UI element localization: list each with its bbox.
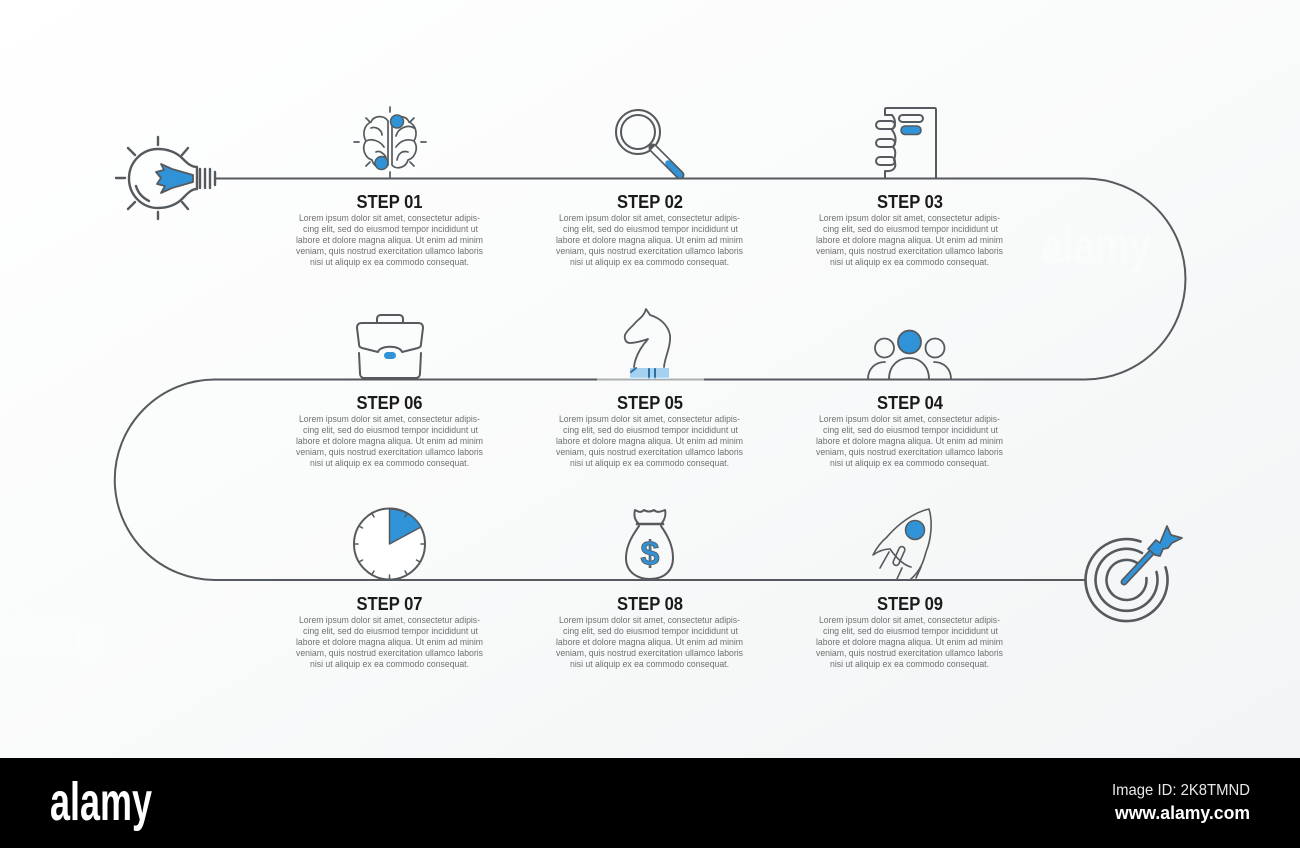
winding roadmap line: [115, 178, 1185, 580]
step 02 text: STEP 02: [617, 192, 683, 212]
step 01 text: veniam, quis nostrud exercitation ullamco laboris: [296, 246, 483, 256]
footer band: alamy: [50, 772, 152, 832]
step 08 text: STEP 08: [617, 594, 683, 614]
step 01 text: [296, 192, 483, 267]
step 09 text: veniam, quis nostrud exercitation ullamco laboris: [816, 648, 1003, 658]
step 07 text: nisi ut aliquip ex ea commodo consequat.: [310, 659, 469, 669]
step 07 text: STEP 07: [356, 594, 422, 614]
step 02 text: nisi ut aliquip ex ea commodo consequat.: [570, 257, 729, 267]
step 05 text: STEP 05: [617, 393, 683, 413]
step 04 text: veniam, quis nostrud exercitation ullamco laboris: [816, 447, 1003, 457]
icon: chess knight: [625, 309, 670, 379]
step 06 text: STEP 06: [356, 393, 422, 413]
icon: magnifying glass: [616, 110, 680, 175]
step 05 text: labore et dolore magna aliqua. Ut enim ad minim: [556, 436, 743, 446]
icon: money bag: [626, 510, 673, 579]
step 06 text: [296, 393, 483, 468]
step 07 text: labore et dolore magna aliqua. Ut enim ad minim: [296, 637, 483, 647]
step 09 text: STEP 09: [877, 594, 943, 614]
step 03 text: [816, 192, 1003, 267]
step 04 text: Lorem ipsum dolor sit amet, consectetur adipis-: [819, 414, 1000, 424]
step 02 text: [556, 192, 743, 267]
icon: document with pills: [876, 108, 936, 178]
step 04 text: labore et dolore magna aliqua. Ut enim ad minim: [816, 436, 1003, 446]
watermarks: [0, 217, 1151, 661]
step 08 text: Lorem ipsum dolor sit amet, consectetur adipis-: [559, 615, 740, 625]
step 05 text: Lorem ipsum dolor sit amet, consectetur adipis-: [559, 414, 740, 424]
step 05 text: veniam, quis nostrud exercitation ullamco laboris: [556, 447, 743, 457]
step 07 text: [296, 594, 483, 669]
step 09 text: nisi ut aliquip ex ea commodo consequat.: [830, 659, 989, 669]
icon: money bag: $: [641, 535, 660, 573]
footer band: www.alamy.com: [1114, 803, 1250, 823]
step 03 text: nisi ut aliquip ex ea commodo consequat.: [830, 257, 989, 267]
step 03 text: veniam, quis nostrud exercitation ullamco laboris: [816, 246, 1003, 256]
step 08 text: labore et dolore magna aliqua. Ut enim ad minim: [556, 637, 743, 647]
step 07 text: cing elit, sed do eiusmod tempor incididunt ut: [303, 626, 478, 636]
step 08 text: veniam, quis nostrud exercitation ullamco laboris: [556, 648, 743, 658]
step 03 text: Lorem ipsum dolor sit amet, consectetur adipis-: [819, 213, 1000, 223]
step 04 text: [816, 393, 1003, 468]
icon: brain: [354, 107, 426, 177]
step 01 text: STEP 01: [356, 192, 422, 212]
watermarks: alamy: [150, 217, 260, 273]
step 04 text: cing elit, sed do eiusmod tempor incididunt ut: [823, 425, 998, 435]
step 06 text: cing elit, sed do eiusmod tempor incididunt ut: [303, 425, 478, 435]
step 02 text: Lorem ipsum dolor sit amet, consectetur adipis-: [559, 213, 740, 223]
step 02 text: labore et dolore magna aliqua. Ut enim ad minim: [556, 235, 743, 245]
icon: start light bulb: [116, 137, 215, 219]
step 01 text: cing elit, sed do eiusmod tempor incididunt ut: [303, 224, 478, 234]
step 08 text: cing elit, sed do eiusmod tempor incididunt ut: [563, 626, 738, 636]
step 04 text: nisi ut aliquip ex ea commodo consequat.: [830, 458, 989, 468]
step 02 text: cing elit, sed do eiusmod tempor incididunt ut: [563, 224, 738, 234]
step 07 text: veniam, quis nostrud exercitation ullamco laboris: [296, 648, 483, 658]
step 05 text: cing elit, sed do eiusmod tempor incididunt ut: [563, 425, 738, 435]
step 09 text: [816, 594, 1003, 669]
step 06 text: Lorem ipsum dolor sit amet, consectetur adipis-: [299, 414, 480, 424]
footer band: [0, 758, 1300, 848]
icon: team of people: [868, 330, 951, 379]
step 07 text: Lorem ipsum dolor sit amet, consectetur adipis-: [299, 615, 480, 625]
step 03 text: STEP 03: [877, 192, 943, 212]
watermark over knight: [597, 378, 704, 381]
step 06 text: veniam, quis nostrud exercitation ullamco laboris: [296, 447, 483, 457]
step 01 text: Lorem ipsum dolor sit amet, consectetur adipis-: [299, 213, 480, 223]
step 01 text: labore et dolore magna aliqua. Ut enim ad minim: [296, 235, 483, 245]
step 08 text: [556, 594, 743, 669]
step 05 text: nisi ut aliquip ex ea commodo consequat.: [570, 458, 729, 468]
step 09 text: Lorem ipsum dolor sit amet, consectetur adipis-: [819, 615, 1000, 625]
icon: briefcase: [357, 315, 423, 378]
step 05 text: [556, 393, 743, 468]
step 08 text: nisi ut aliquip ex ea commodo consequat.: [570, 659, 729, 669]
step 03 text: labore et dolore magna aliqua. Ut enim ad minim: [816, 235, 1003, 245]
icon: rocket: [873, 509, 931, 579]
step 09 text: cing elit, sed do eiusmod tempor incididunt ut: [823, 626, 998, 636]
step 01 text: nisi ut aliquip ex ea commodo consequat.: [310, 257, 469, 267]
step 06 text: nisi ut aliquip ex ea commodo consequat.: [310, 458, 469, 468]
step 02 text: veniam, quis nostrud exercitation ullamco laboris: [556, 246, 743, 256]
icon: target with arrow: [1086, 526, 1182, 621]
icon: clock: [354, 508, 425, 580]
step 03 text: cing elit, sed do eiusmod tempor incididunt ut: [823, 224, 998, 234]
step 09 text: labore et dolore magna aliqua. Ut enim ad minim: [816, 637, 1003, 647]
footer band: Image ID: 2K8TMND: [1112, 782, 1250, 799]
step 04 text: STEP 04: [877, 393, 943, 413]
watermarks: alamy: [1041, 217, 1151, 273]
step 06 text: labore et dolore magna aliqua. Ut enim ad minim: [296, 436, 483, 446]
